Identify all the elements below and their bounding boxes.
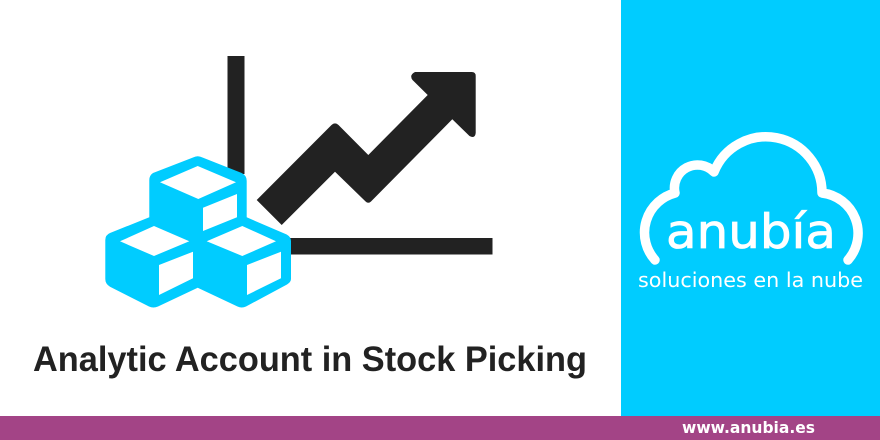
logo: anubia cloud bbox=[638, 137, 863, 292]
icon: stacked cubes bbox=[105, 156, 291, 308]
chart horizontal axis bbox=[288, 238, 492, 254]
logo wordmark: anubía bbox=[666, 205, 836, 260]
cubes silhouette bbox=[105, 156, 291, 308]
chart vertical axis bbox=[228, 56, 244, 174]
logo tagline: soluciones en la nube bbox=[638, 268, 863, 292]
icon: rising arrow bbox=[257, 72, 476, 225]
heading: Analytic Account in Stock Picking bbox=[33, 340, 587, 379]
icon: growth chart bbox=[228, 56, 492, 254]
cube faces bbox=[120, 166, 281, 295]
logo cloud outline bbox=[645, 137, 858, 260]
footer bar bbox=[0, 416, 880, 440]
panel: blue brand sidebar bbox=[621, 0, 880, 416]
footer website url: www.anubia.es bbox=[682, 418, 815, 437]
